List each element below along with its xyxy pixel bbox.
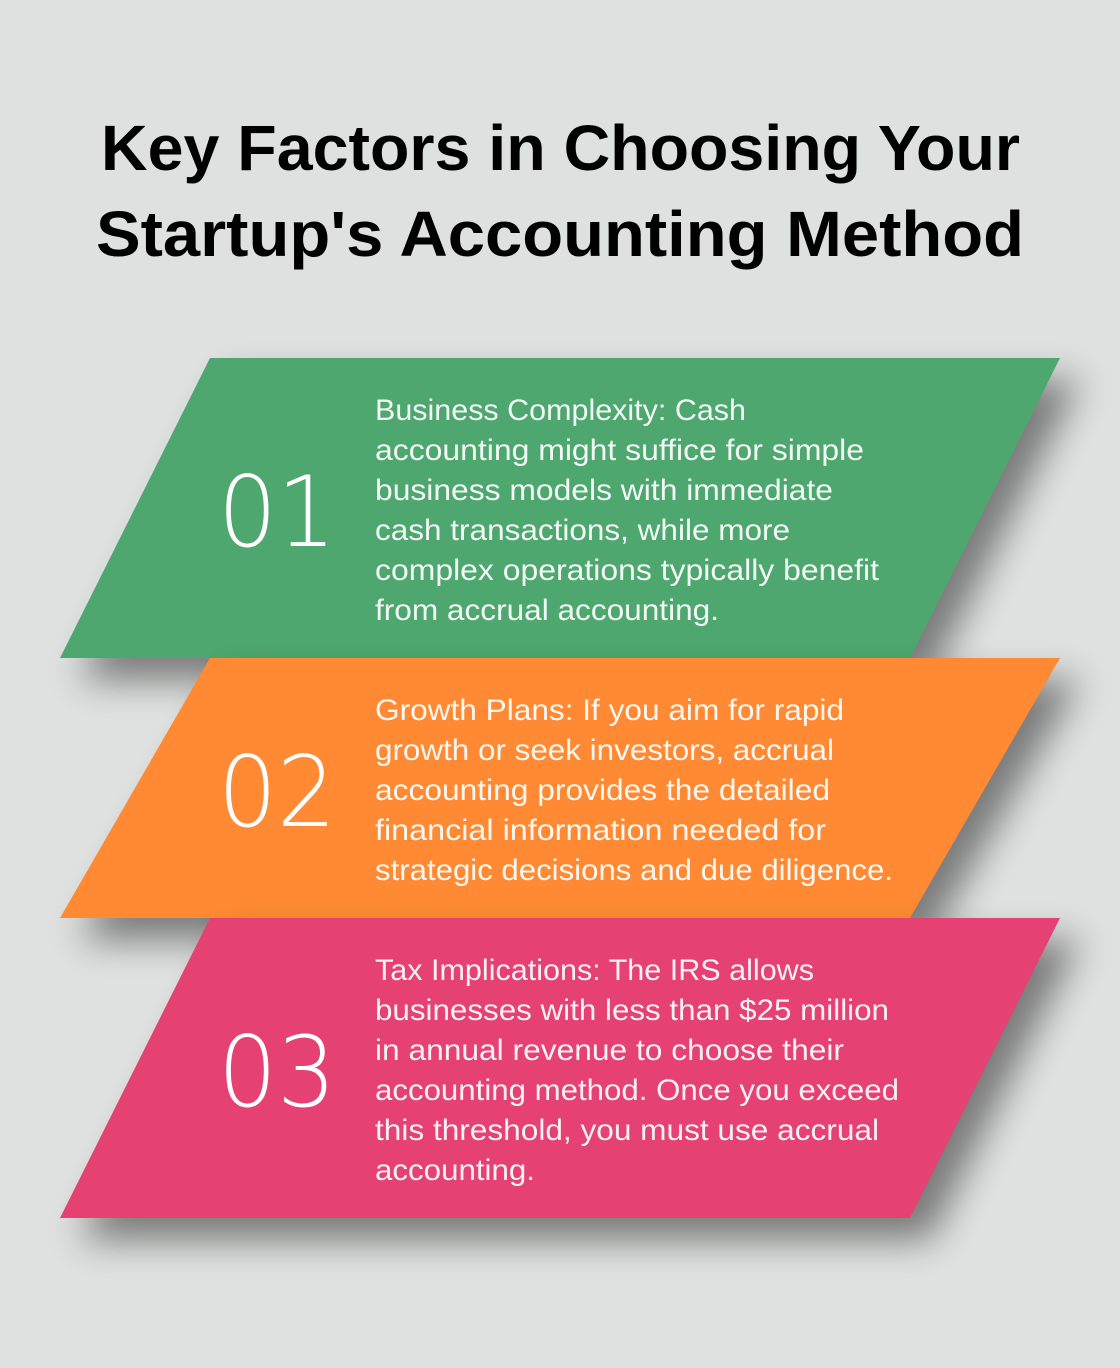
text: business complexity	[375, 394, 880, 627]
title	[96, 112, 1024, 270]
text: tax implications: accounting method. Once you exceed	[375, 1074, 899, 1107]
panel: tax implications	[60, 918, 1060, 1218]
title: Startup's Accounting Method	[96, 198, 1024, 270]
number 03: 03	[218, 1016, 336, 1130]
text: growth plans: accounting provides the detailed	[375, 774, 830, 807]
text: growth plans: Growth Plans: If you aim for rapid	[375, 694, 844, 727]
panel: business complexity	[60, 358, 1060, 658]
text: business complexity: cash transactions, while more	[375, 514, 790, 547]
text: business complexity: business models with immediate	[375, 474, 833, 507]
text: tax implications: Tax Implications: The IRS allows	[375, 954, 814, 987]
text: tax implications: in annual revenue to choose their	[375, 1034, 844, 1067]
number 01: 01	[218, 456, 336, 570]
text: tax implications: accounting.	[375, 1154, 535, 1187]
text: business complexity: accounting might suffice for simple	[375, 434, 864, 467]
text: business complexity: complex operations typically benefit	[375, 554, 880, 587]
text: tax implications: this threshold, you must use accrual	[375, 1114, 879, 1147]
parallelogram: orange	[60, 658, 1060, 918]
panel: growth plans	[60, 658, 1060, 918]
title: Key Factors in Choosing Your	[101, 112, 1020, 184]
text: growth plans: strategic decisions and due diligence.	[375, 854, 893, 887]
parallelogram: pink	[60, 918, 1060, 1218]
parallelogram: green	[60, 358, 1060, 658]
text: business complexity: from accrual accounting.	[375, 594, 719, 627]
text: tax implications: businesses with less than $25 million	[375, 994, 889, 1027]
text: growth plans: financial information needed for	[375, 814, 826, 847]
text: business complexity: Business Complexity: Cash	[375, 394, 746, 427]
number 02: 02	[218, 736, 336, 850]
text: tax implications	[375, 954, 899, 1187]
text: growth plans: growth or seek investors, accrual	[375, 734, 834, 767]
text: growth plans	[375, 694, 893, 887]
